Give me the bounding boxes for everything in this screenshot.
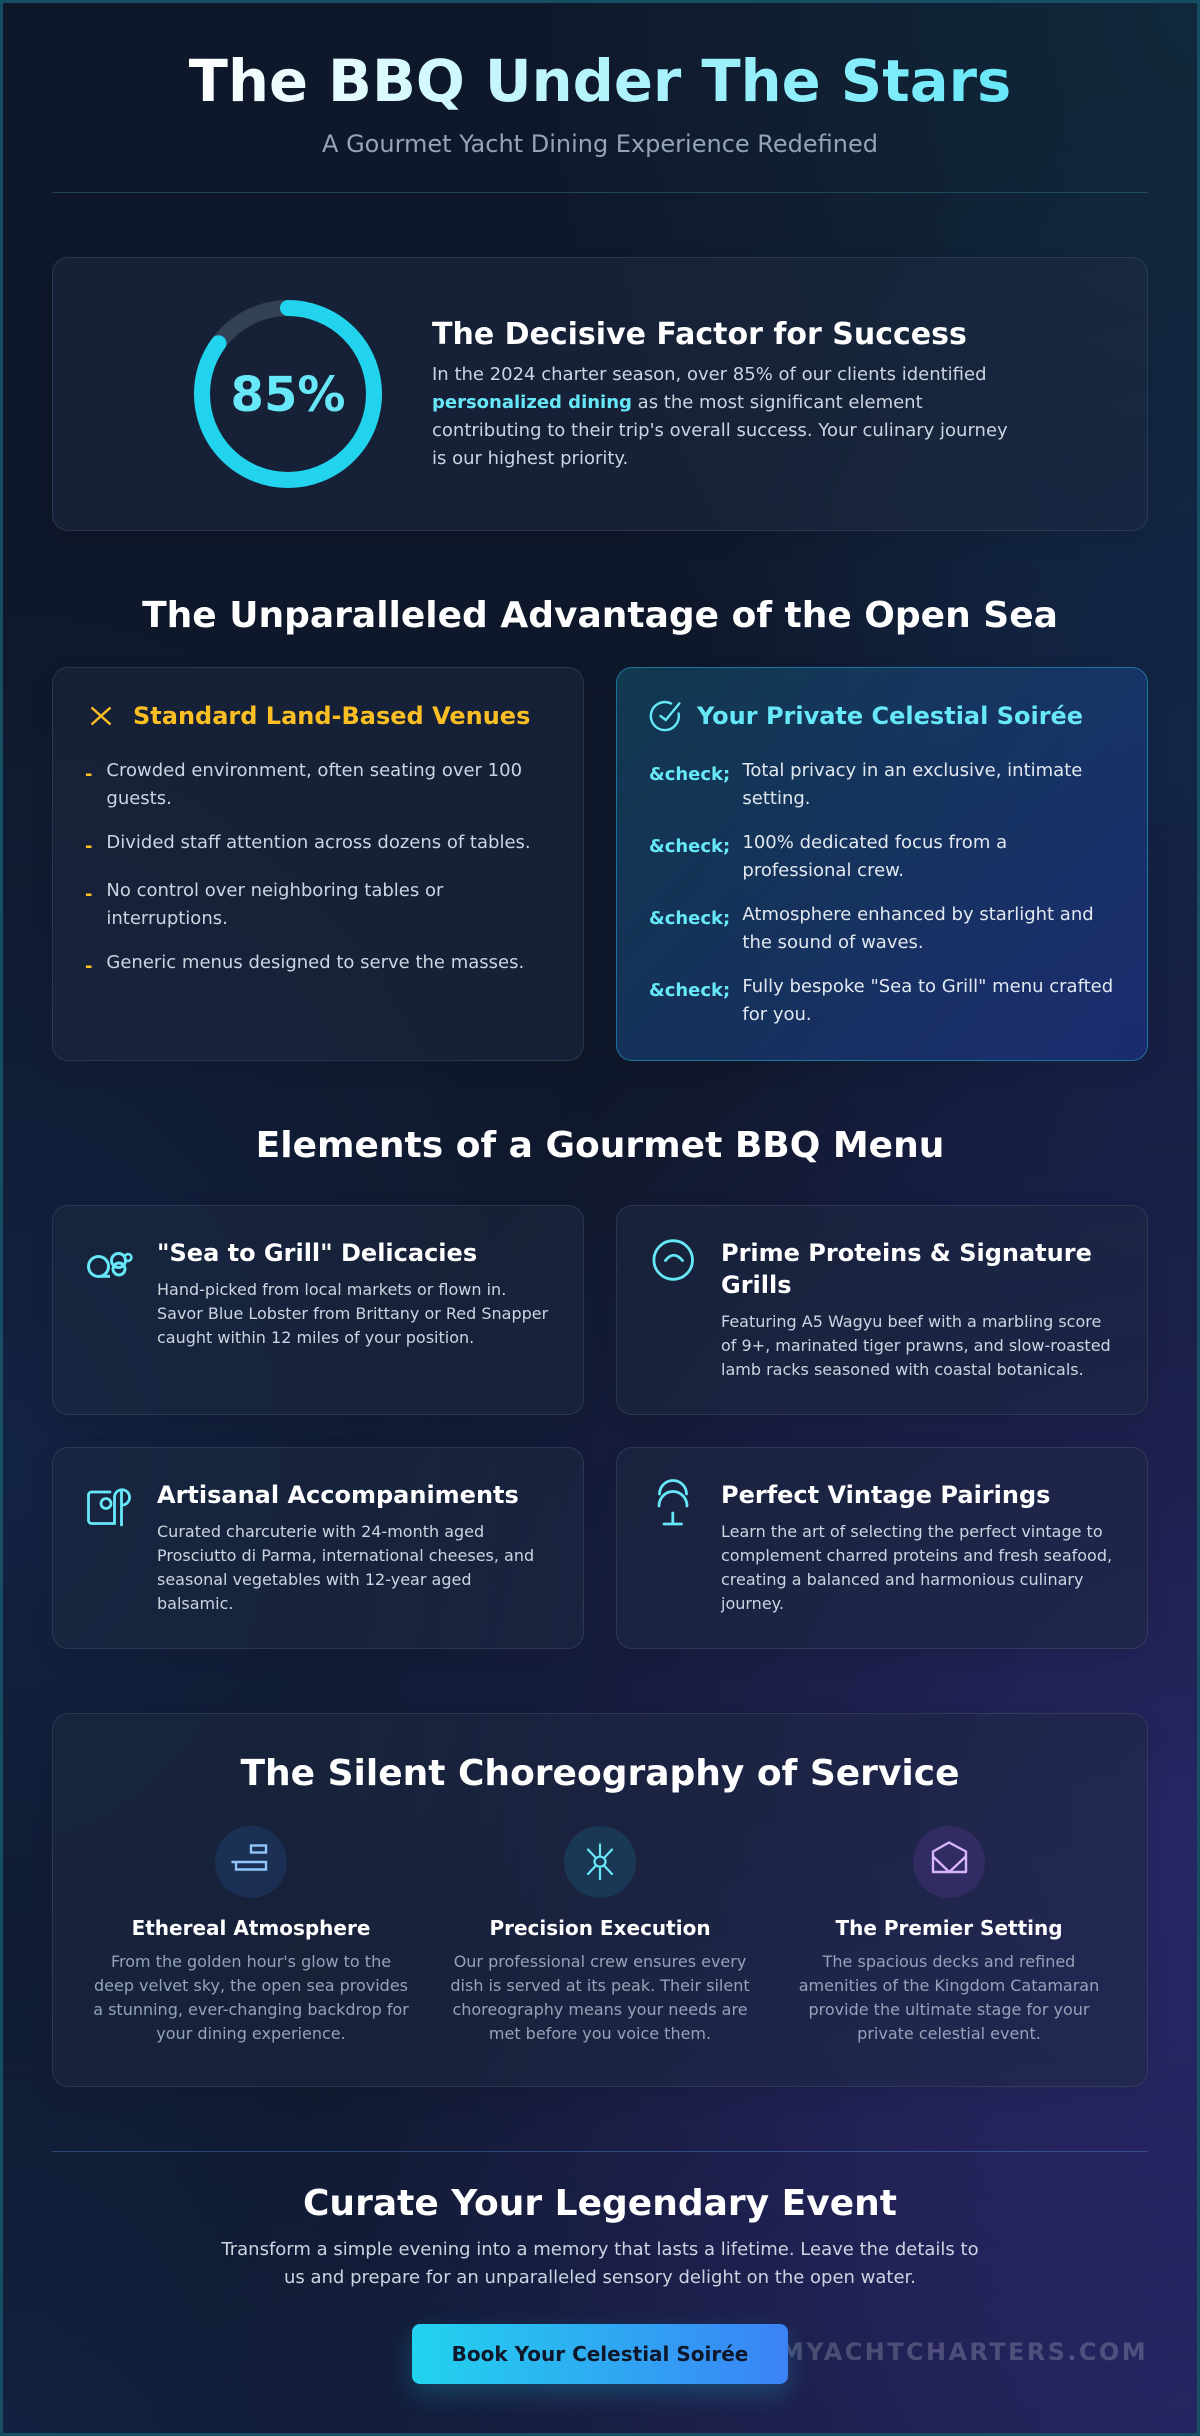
panel: prime proteins [616, 1205, 1148, 1415]
text: Prosciutto di Parma, international cheeses, and [157, 1546, 534, 1565]
text [93, 1952, 409, 2043]
text [721, 1312, 1111, 1379]
icon: precision [564, 1826, 636, 1898]
text: decisive factor [432, 364, 1008, 469]
heading: service: The Silent Choreography of Service [240, 1753, 960, 1794]
text [157, 1280, 548, 1347]
panel: decisive factor [52, 257, 1148, 531]
list item: - [85, 956, 92, 977]
button: book [412, 2324, 788, 2384]
list item [649, 760, 1082, 809]
heading: decisive factor: The Decisive Factor for Success [432, 317, 967, 352]
text: choreography means your needs are [452, 2000, 748, 2019]
text [720, 1522, 1112, 1613]
text: Curated charcuterie with 24-month aged [157, 1522, 484, 1541]
text: decisive factor: personalized dining as the most significant element [432, 392, 923, 413]
list item [649, 904, 1094, 953]
text: balsamic. [157, 1594, 233, 1613]
icon: seafood [87, 1252, 133, 1278]
heading [721, 1239, 1092, 1299]
list item: - [85, 764, 92, 785]
heading: Precision Execution [489, 1916, 711, 1940]
text: The spacious decks and refined [823, 1952, 1075, 1971]
text: your dining experience. [156, 2024, 346, 2043]
list item: &check; [649, 836, 730, 857]
icon: check circle [650, 700, 681, 732]
text: decisive factor: is our highest priority. [432, 448, 628, 469]
text: of 9+, marinated tiger prawns, and slow-roasted [721, 1336, 1111, 1355]
list item: interruptions. [106, 908, 228, 929]
list item: Total privacy in an exclusive, intimate [742, 760, 1082, 781]
title: The BBQ Under The Stars [189, 48, 1011, 115]
list item [85, 880, 444, 929]
panel: artisanal [52, 1447, 584, 1649]
list item: the sound of waves. [742, 932, 924, 953]
panel: sea to grill [52, 1205, 584, 1415]
text: creating a balanced and harmonious culinary [721, 1570, 1083, 1589]
text: complement charred proteins and fresh seafood, [721, 1546, 1112, 1565]
heading: celestial soiree: Your Private Celestial Soirée [697, 702, 1083, 730]
text [450, 1952, 750, 2043]
text: seasonal vegetables with 12-year aged [157, 1570, 471, 1589]
heading: Grills [721, 1271, 792, 1299]
list item: &check; [649, 980, 730, 1001]
list item: No control over neighboring tables or [106, 880, 443, 901]
heading: Ethereal Atmosphere [132, 1916, 370, 1940]
text [157, 1522, 534, 1613]
text: cta: us and prepare for an unparalleled sensory delight on the open water. [284, 2267, 916, 2288]
heading: The Premier Setting [835, 1916, 1063, 1940]
list item [649, 832, 1007, 881]
heading: land venues: Standard Land-Based Venues [133, 702, 530, 730]
text: provide the ultimate stage for your [808, 2000, 1089, 2019]
text: private celestial event. [857, 2024, 1041, 2043]
list item: &check; [649, 764, 730, 785]
list item: - [85, 836, 92, 857]
text: dish is served at its peak. Their silent [450, 1976, 750, 1995]
list item: Crowded environment, often seating over 100 [106, 760, 522, 781]
list item: for you. [742, 1004, 812, 1025]
list item: guests. [106, 788, 172, 809]
icon: atmosphere [215, 1826, 287, 1898]
list item: - [85, 884, 92, 905]
text: lamb racks seasoned with coastal botanicals. [721, 1360, 1084, 1379]
text: From the golden hour's glow to the [111, 1952, 391, 1971]
text: Savor Blue Lobster from Brittany or Red Snapper [157, 1304, 548, 1323]
panel: service [52, 1713, 1148, 2087]
icon: x [90, 706, 112, 726]
text: Hand-picked from local markets or flown in. [157, 1280, 506, 1299]
panel: vintage [616, 1447, 1148, 1649]
list item: Generic menus designed to serve the masses. [106, 952, 524, 973]
chart: 85% donut [194, 300, 382, 488]
text [799, 1952, 1099, 2043]
list item: Fully bespoke "Sea to Grill" menu crafted [742, 976, 1113, 997]
icon: grill [652, 1239, 694, 1281]
list item [649, 976, 1113, 1025]
text: Our professional crew ensures every [454, 1952, 746, 1971]
button: book: Book Your Celestial Soirée [452, 2342, 748, 2366]
text: Featuring A5 Wagyu beef with a marbling score [721, 1312, 1101, 1331]
subtitle: A Gourmet Yacht Dining Experience Redefined [322, 130, 878, 158]
list item: 100% dedicated focus from a [742, 832, 1007, 853]
list item [85, 760, 522, 809]
text: journey. [721, 1594, 784, 1613]
text: deep velvet sky, the open sea provides [94, 1976, 408, 1995]
list item: Divided staff attention across dozens of tables. [106, 832, 531, 853]
text: met before you voice them. [489, 2024, 711, 2043]
list item: Atmosphere enhanced by starlight and [742, 904, 1094, 925]
text: Learn the art of selecting the perfect vintage to [721, 1522, 1103, 1541]
text: cta: Transform a simple evening into a memory that lasts a lifetime. Leave the details to [221, 2239, 979, 2260]
heading: Artisanal Accompaniments [157, 1481, 519, 1509]
text: decisive factor: contributing to their trip's overall success. Your culinary journey [432, 420, 1008, 441]
heading: advantage: The Unparalleled Advantage of the Open Sea [142, 595, 1058, 636]
text: amenities of the Kingdom Catamaran [799, 1976, 1099, 1995]
list item: professional crew. [742, 860, 904, 881]
stat: 85%: 85% [231, 367, 345, 423]
text: caught within 12 miles of your position. [157, 1328, 474, 1347]
icon: board [87, 1488, 131, 1526]
list item: &check; [649, 908, 730, 929]
icon: premier [913, 1826, 985, 1898]
panel: land venues [52, 667, 584, 1061]
text: a stunning, ever-changing backdrop for [93, 2000, 409, 2019]
text: decisive factor: In the 2024 charter season, over 85% of our clients identified [432, 364, 986, 385]
heading: Perfect Vintage Pairings [721, 1481, 1050, 1509]
watermark: MYACHTCHARTERS.COM [780, 2338, 1148, 2366]
heading: cta: Curate Your Legendary Event [303, 2183, 897, 2224]
list item: setting. [742, 788, 811, 809]
heading: Prime Proteins & Signature [721, 1239, 1092, 1267]
heading: "Sea to Grill" Delicacies [157, 1239, 477, 1267]
icon: wine [658, 1479, 688, 1526]
panel: celestial soiree [616, 667, 1148, 1061]
text: cta [221, 2239, 979, 2288]
heading: menu: Elements of a Gourmet BBQ Menu [256, 1125, 944, 1166]
